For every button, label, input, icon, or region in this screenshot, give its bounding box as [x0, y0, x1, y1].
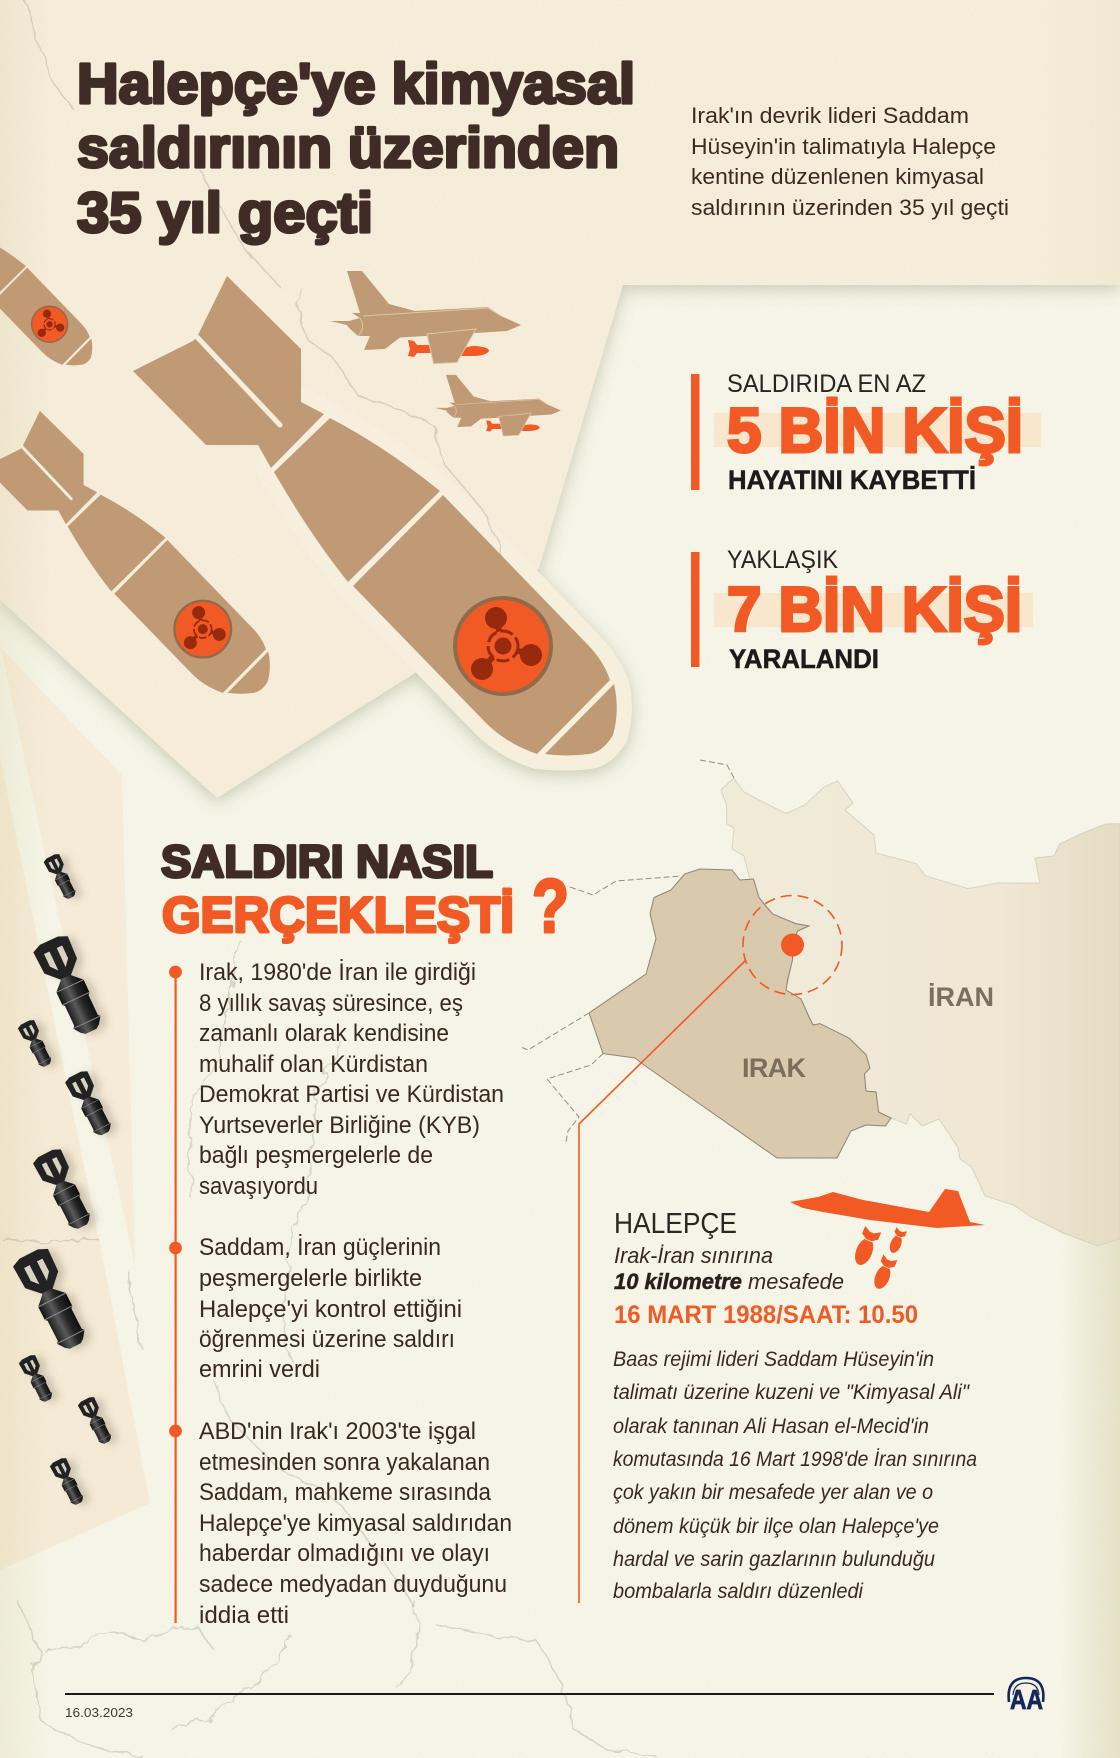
- text block: point three: etmesinden sonra yakalanan: [199, 1449, 490, 1476]
- text block: point two: öğrenmesi üzerine saldırı: [199, 1326, 455, 1353]
- stat: 5 bin kişi: [691, 370, 1041, 495]
- stat: 7 bin kişi: YAKLAŞIK: [727, 546, 838, 574]
- logo: Anadolu Agency: [1009, 1678, 1043, 1715]
- title: [77, 52, 635, 245]
- text block: point two: peşmergelerle birlikte: [199, 1265, 422, 1292]
- text block: point two: emrini verdi: [199, 1356, 320, 1383]
- text block: attack details: olarak tanınan Ali Hasan el-Mecid'in: [613, 1415, 929, 1438]
- stat: 7 bin kişi: YARALANDI: [729, 644, 879, 674]
- title: saldırının üzerinden: [77, 116, 619, 180]
- text block: point one: Yurtseverler Birliğine (KYB): [199, 1112, 480, 1139]
- timeline: [169, 966, 182, 1623]
- icon: medium bomb: [0, 411, 270, 694]
- icon: small bomb top-left: [0, 186, 92, 365]
- date: 16.03.2023: [65, 1705, 133, 1720]
- text block: point three: sadece medyadan duyduğunu: [199, 1571, 507, 1598]
- intro paragraph: Irak'ın devrik lideri Saddam: [691, 103, 969, 128]
- text block: attack details: bombalarla saldırı düzenledi: [613, 1580, 864, 1603]
- heading: how it happened: GERÇEKLEŞTİ: [162, 887, 514, 943]
- text block: point one: 8 yıllık savaş süresince, eş: [199, 990, 463, 1017]
- icon: large bomb with chemical symbol: [133, 276, 617, 756]
- stat: 7 bin kişi: 7 BİN KİŞİ: [727, 575, 1022, 645]
- text block: Halabja header: mesafede: [748, 1269, 844, 1294]
- title: 35 yıl geçti: [77, 181, 373, 245]
- text block: point one: Demokrat Partisi ve Kürdistan: [199, 1081, 504, 1108]
- text block: point three: haberdar olmadığını ve olayı: [199, 1540, 490, 1567]
- text block: attack details: [613, 1348, 977, 1603]
- map marker: Halabja: [743, 896, 842, 994]
- text block: point three: Halepçe'ye kimyasal saldırıdan: [199, 1510, 512, 1537]
- intro paragraph: saldırının üzerinden 35 yıl geçti: [691, 195, 1009, 220]
- text block: point two: [199, 1234, 462, 1383]
- heading: how it happened: [161, 836, 569, 949]
- text block: point two: Halepçe'yi kontrol ettiğini: [199, 1296, 462, 1323]
- footer rule: [65, 1693, 994, 1695]
- icon: orange jet dropping bombs: [790, 1189, 985, 1291]
- intro paragraph: Hüseyin'in talimatıyla Halepçe: [691, 134, 996, 159]
- map label: Iran: İRAN: [928, 982, 994, 1012]
- text block: point one: [199, 959, 504, 1200]
- text block: point three: Saddam, mahkeme sırasında: [199, 1479, 492, 1506]
- text block: attack details: talimatı üzerine kuzeni ve "Kimyasal Ali": [613, 1381, 970, 1404]
- logo: Anadolu Agency: AA: [1010, 1684, 1043, 1715]
- text block: point one: Irak, 1980'de İran ile girdiği: [199, 959, 476, 986]
- text block: attack details: çok yakın bir mesafede yer alan ve o: [613, 1481, 933, 1504]
- icon: falling black bombs: [11, 853, 116, 1508]
- stat: 7 bin kişi: [691, 546, 1033, 674]
- text block: attack details: hardal ve sarin gazlarının bulunduğu: [613, 1548, 935, 1571]
- heading: how it happened: SALDIRI NASIL: [161, 836, 493, 887]
- text block: point three: [199, 1418, 512, 1629]
- text block: Halabja header: Irak-İran sınırına: [614, 1243, 773, 1268]
- callout line: [579, 960, 746, 1603]
- text block: point one: zamanlı olarak kendisine: [199, 1020, 449, 1047]
- panel: left beige bands: [0, 648, 150, 1570]
- map: Iran: [721, 778, 1120, 1246]
- panel: top beige paper: [0, 0, 1120, 798]
- intro paragraph: [691, 103, 1009, 220]
- map: Iraq: [589, 869, 891, 1158]
- text block: point two: Saddam, İran güçlerinin: [199, 1234, 441, 1261]
- title: Halepçe'ye kimyasal: [77, 52, 635, 116]
- map label: Iraq: IRAK: [742, 1053, 806, 1083]
- text block: Halabja header: 16 MART 1988/SAAT: 10.50: [614, 1301, 918, 1329]
- stat: 5 bin kişi: SALDIRIDA EN AZ: [727, 370, 926, 398]
- text block: Halabja header: HALEPÇE: [614, 1208, 737, 1240]
- text block: point one: muhalif olan Kürdistan: [199, 1051, 428, 1078]
- stat: 5 bin kişi: 5 BİN KİŞİ: [727, 396, 1023, 466]
- text block: Halabja header: [614, 1208, 918, 1329]
- text block: point one: bağlı peşmergelerle de: [199, 1142, 433, 1169]
- text block: attack details: komutasında 16 Mart 1998'de İran sınırına: [613, 1448, 977, 1471]
- icon: fighter jet small: [435, 375, 561, 436]
- text block: point three: iddia etti: [199, 1602, 289, 1629]
- text block: point one: savaşıyordu: [199, 1173, 318, 1200]
- text block: attack details: Baas rejimi lideri Saddam Hüseyin'in: [613, 1348, 934, 1371]
- text block: attack details: dönem küçük bir ilçe olan Halepçe'ye: [613, 1515, 939, 1538]
- heading: how it happened: ?: [532, 864, 569, 949]
- stat: 5 bin kişi: HAYATINI KAYBETTİ: [728, 465, 976, 495]
- icon: fighter jet large: [330, 271, 521, 364]
- intro paragraph: kentine düzenlenen kimyasal: [691, 164, 984, 189]
- text block: Halabja header: 10 kilometre: [614, 1269, 742, 1294]
- text block: point three: ABD'nin Irak'ı 2003'te işgal: [199, 1418, 476, 1445]
